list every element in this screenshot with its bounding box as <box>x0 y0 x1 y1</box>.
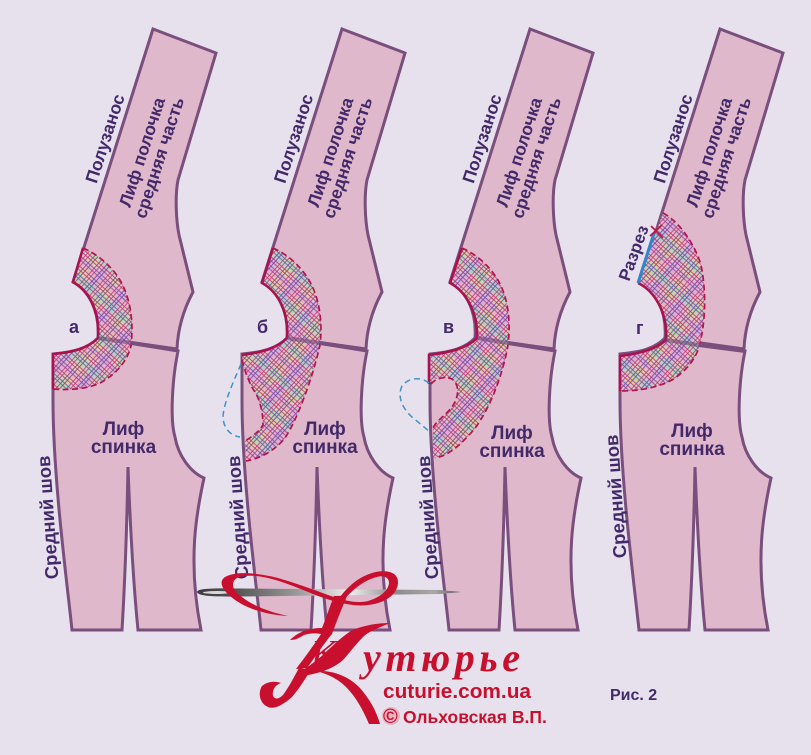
label Лиф спинка б: Лиф <box>304 419 346 440</box>
label Полузанос в: Полузанос <box>458 91 506 185</box>
cut end mark <box>650 225 663 238</box>
leg of the letter К <box>316 671 380 724</box>
panel б <box>223 29 405 630</box>
letter б: б <box>257 317 268 337</box>
hatched allowance а <box>53 248 132 389</box>
label Лиф спинка г: Лиф <box>671 421 713 442</box>
front bodice piece а <box>73 29 216 349</box>
front bodice piece г <box>640 29 783 349</box>
back bodice piece г <box>620 338 771 630</box>
letter а: а <box>69 317 80 337</box>
label Лиф спинка в: Лиф <box>491 423 533 444</box>
cut line <box>638 233 654 283</box>
front bodice piece в <box>450 29 593 349</box>
label Лиф полочка в: средняя часть <box>507 94 565 221</box>
thread swirl <box>222 571 398 616</box>
label Полузанос б: Полузанос <box>270 91 317 185</box>
label Лиф полочка а: средняя часть <box>130 94 188 221</box>
seam line а <box>98 338 178 350</box>
label Полузанос г: Полузанос <box>649 91 697 185</box>
back bodice piece в <box>430 338 581 630</box>
blue dashed outline б <box>223 364 241 437</box>
panel в <box>400 29 593 630</box>
label Разрез: Разрез <box>615 223 653 283</box>
wordmark Кутюрье: утюрье <box>359 635 520 680</box>
label Лиф полочка б: средняя часть <box>318 94 376 221</box>
blue dashed outline в <box>400 379 430 432</box>
arm of the letter К <box>298 623 390 675</box>
icon: needle <box>197 588 461 597</box>
panel г <box>601 29 783 630</box>
label Полузанос а: Полузанос <box>81 91 129 185</box>
label Средний шов г: Средний шов <box>601 434 630 559</box>
back bodice piece а <box>53 338 204 630</box>
copyright credit: © <box>383 706 398 728</box>
hatched allowance б <box>242 248 321 461</box>
site address: cuturie.com.ua <box>383 680 532 703</box>
figure caption: Рис. 2 <box>610 687 657 704</box>
label Лиф полочка г: средняя часть <box>697 94 755 221</box>
panel а <box>33 29 216 630</box>
back bodice piece б <box>242 338 393 630</box>
wordmark Кутюрье: К <box>310 633 338 675</box>
seam line б <box>287 338 367 350</box>
label Средний шов в: Средний шов <box>413 455 442 580</box>
hatched allowance г <box>620 213 705 391</box>
front bodice piece б <box>262 29 405 349</box>
label Лиф полочка б: Лиф полочка <box>303 95 357 209</box>
seam line г <box>666 340 745 351</box>
logo <box>197 571 547 728</box>
lower curl of the letter К <box>260 668 311 708</box>
letter г: г <box>636 318 644 338</box>
label Лиф спинка а: Лиф <box>103 419 144 440</box>
seam line в <box>477 338 555 350</box>
label Лиф полочка г: Лиф полочка <box>682 95 736 209</box>
label Лиф полочка в: Лиф полочка <box>492 95 546 209</box>
label Лиф спинка а: спинка <box>91 437 157 458</box>
label Лиф спинка в: спинка <box>479 441 545 462</box>
letter в: в <box>443 317 454 337</box>
copyright credit: Ольховская В.П. <box>403 707 547 727</box>
label Лиф спинка б: спинка <box>292 437 358 458</box>
label Лиф полочка а: Лиф полочка <box>115 95 169 209</box>
label Средний шов а: Средний шов <box>33 455 62 580</box>
label Средний шов б: Средний шов <box>223 455 252 580</box>
hatched allowance в <box>429 248 509 458</box>
stem of the letter К <box>290 596 347 669</box>
label Лиф спинка г: спинка <box>659 439 725 460</box>
